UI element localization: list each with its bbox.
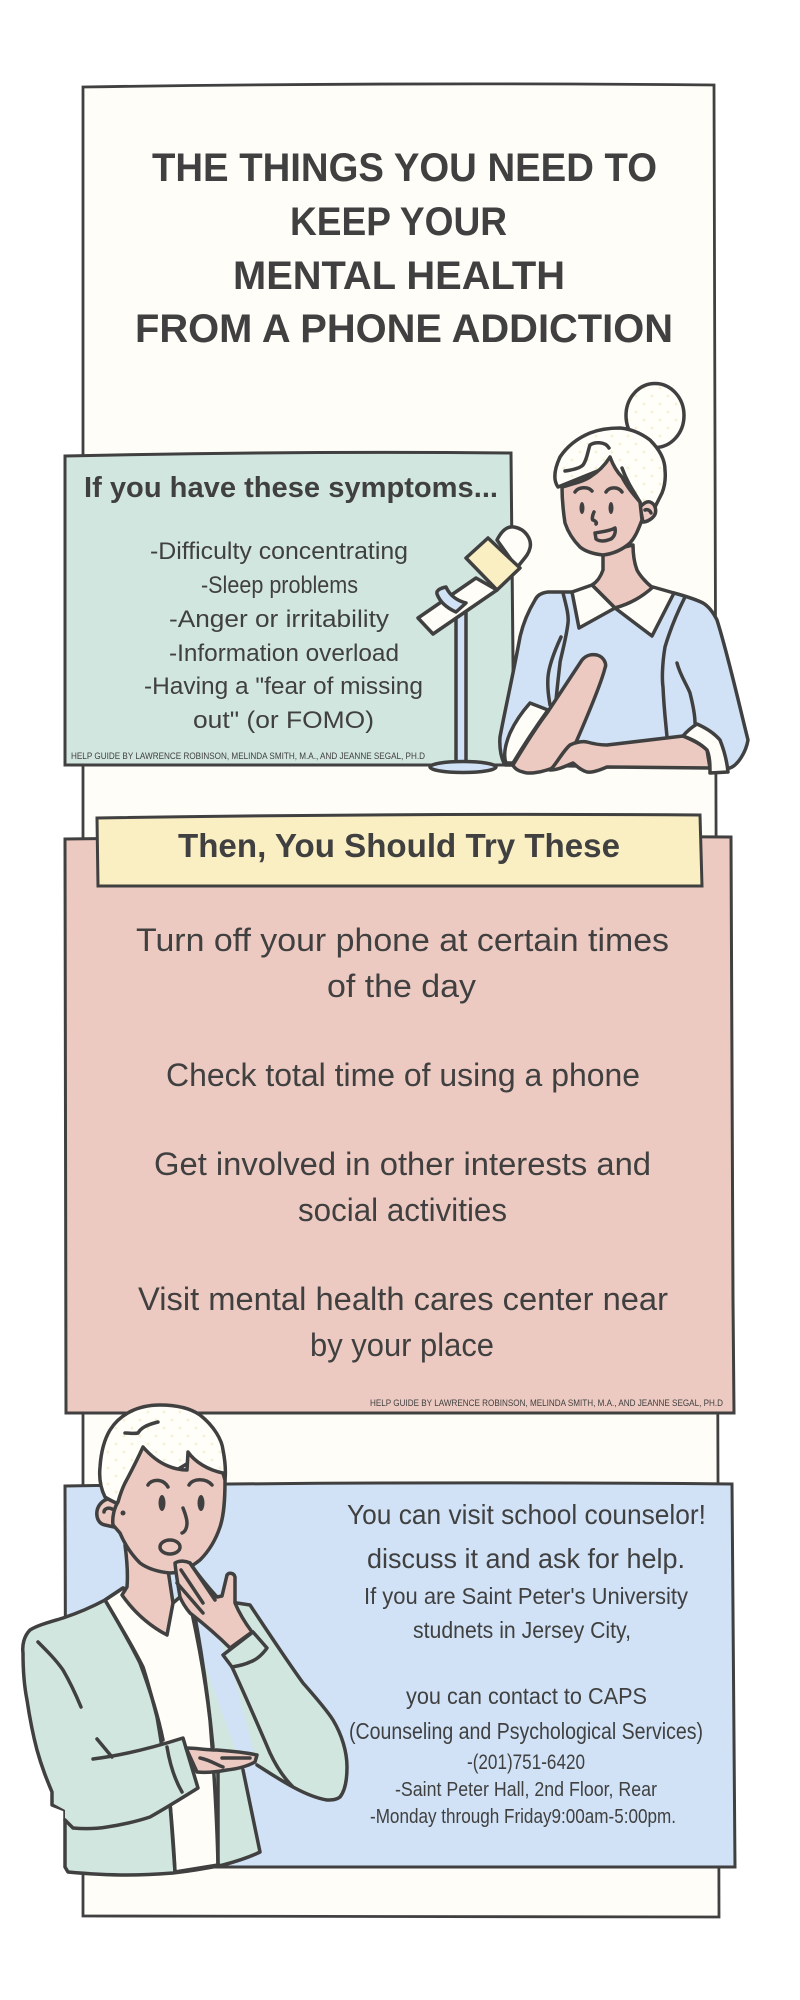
title: FROM A PHONE ADDICTION xyxy=(135,307,673,351)
recommendations list: Turn off your phone at certain times xyxy=(136,922,669,958)
panel: recommendations xyxy=(65,836,734,1413)
recommendations source: HELP GUIDE BY LAWRENCE ROBINSON, MELINDA SMITH, M.A., AND JEANNE SEGAL, PH.D xyxy=(370,1398,723,1409)
symptoms list: -Sleep problems xyxy=(201,572,358,599)
contact text: you can contact to CAPS xyxy=(406,1683,647,1709)
contact text: If you are Saint Peter's University xyxy=(364,1583,688,1609)
contact text: You can visit school counselor! xyxy=(347,1499,706,1530)
banner: then try these: Then, You Should Try These xyxy=(178,827,620,864)
illustration: woman xyxy=(500,384,748,773)
symptoms list: -Having a "fear of missing xyxy=(144,673,423,700)
contact text: studnets in Jersey City, xyxy=(413,1617,631,1643)
panel: counselor contact xyxy=(65,1483,735,1867)
recommendations list: of the day xyxy=(327,968,476,1004)
background panel xyxy=(83,84,719,1917)
title xyxy=(135,146,673,351)
contact text: (Counseling and Psychological Services) xyxy=(349,1718,703,1744)
recommendations list: Visit mental health cares center near xyxy=(138,1281,668,1317)
contact text: -Saint Peter Hall, 2nd Floor, Rear xyxy=(395,1779,657,1801)
recommendations list xyxy=(136,922,669,1363)
contact text: -Monday through Friday9:00am-5:00pm. xyxy=(370,1806,676,1828)
banner: then try these xyxy=(97,814,702,886)
recommendations list: social activities xyxy=(298,1192,507,1228)
symptoms list: -Information overload xyxy=(169,640,399,667)
symptoms list: -Anger or irritability xyxy=(169,606,389,633)
recommendations list: Get involved in other interests and xyxy=(154,1146,651,1182)
title: KEEP YOUR xyxy=(290,200,507,244)
title: MENTAL HEALTH xyxy=(233,254,565,298)
panel: symptoms xyxy=(65,452,514,765)
recommendations list: Check total time of using a phone xyxy=(166,1057,640,1093)
symptoms list xyxy=(144,538,423,734)
icon: microphone xyxy=(418,527,530,772)
recommendations list: by your place xyxy=(310,1327,494,1363)
symptoms heading: If you have these symptoms... xyxy=(84,472,498,504)
contact text: discuss it and ask for help. xyxy=(367,1543,685,1574)
illustration: man xyxy=(23,1405,347,1875)
title: THE THINGS YOU NEED TO xyxy=(152,146,657,190)
symptoms source: HELP GUIDE BY LAWRENCE ROBINSON, MELINDA SMITH, M.A., AND JEANNE SEGAL, PH.D xyxy=(71,751,425,762)
symptoms list: out" (or FOMO) xyxy=(193,707,374,734)
contact text xyxy=(347,1499,706,1828)
contact text: -(201)751-6420 xyxy=(467,1751,585,1774)
symptoms list: -Difficulty concentrating xyxy=(150,538,408,565)
